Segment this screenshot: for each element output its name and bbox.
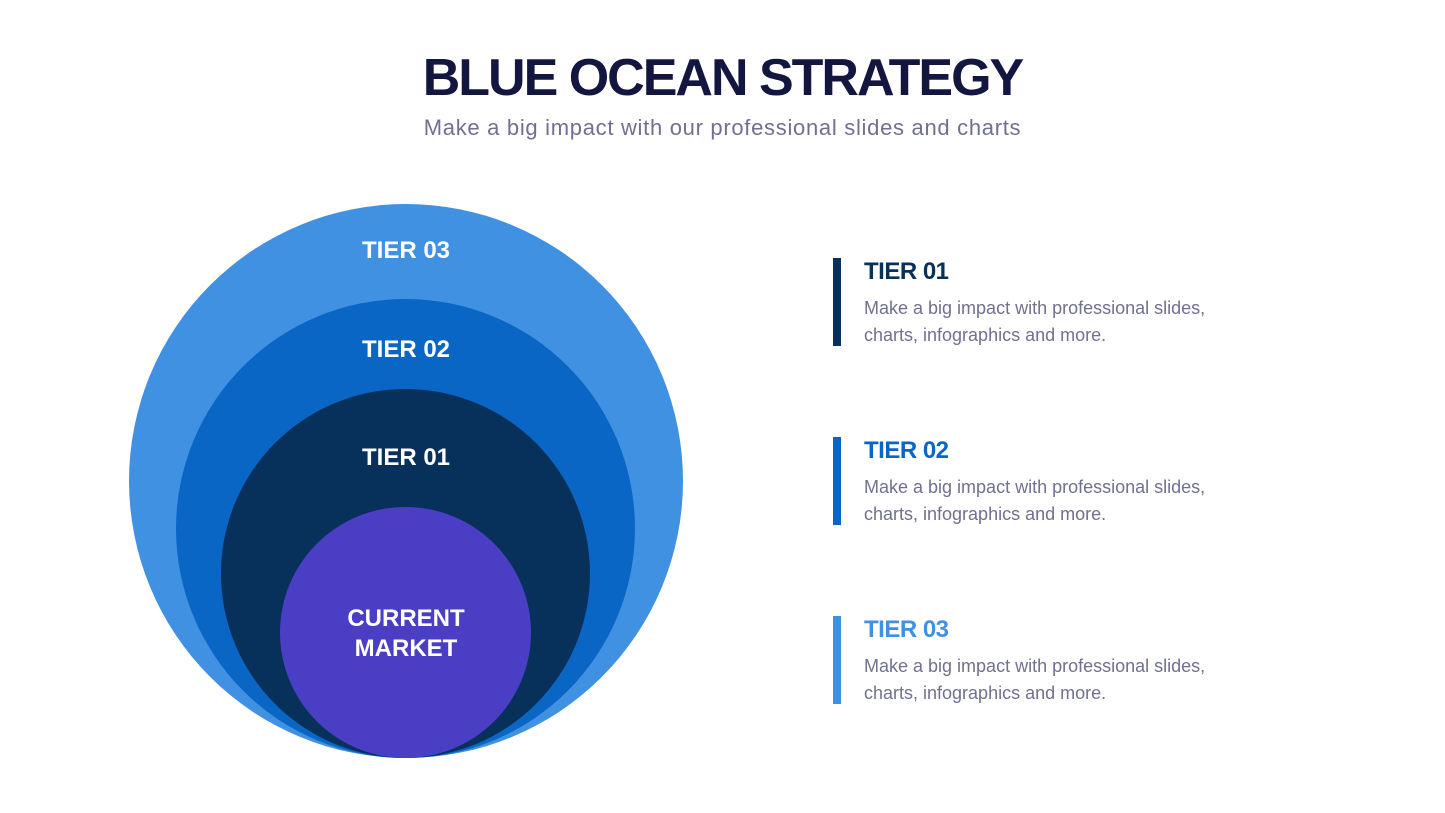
circle: tier 01: TIER 01 <box>362 444 450 471</box>
title: BLUE OCEAN STRATEGY <box>423 49 1022 107</box>
heading: TIER 02 <box>864 437 949 464</box>
circle: current market: MARKET <box>355 635 458 662</box>
item: tier 01 <box>833 258 1205 346</box>
subtitle: Make a big impact with our professional slides and charts <box>424 115 1021 140</box>
bar <box>833 258 841 346</box>
heading: TIER 01 <box>864 258 949 285</box>
circle: current market: CURRENT <box>347 605 465 632</box>
circle: tier 01 <box>221 389 590 758</box>
bar <box>833 437 841 525</box>
circle: current market <box>280 507 531 758</box>
circle: tier 03 <box>129 204 683 758</box>
item: tier 03 <box>833 616 1205 704</box>
circle: tier 03: TIER 03 <box>362 237 450 264</box>
text: Make a big impact with professional slides, charts, infographics and more. <box>864 477 1205 524</box>
text: Make a big impact with professional slides, charts, infographics and more. <box>864 298 1205 345</box>
text: Make a big impact with professional slides, charts, infographics and more. <box>864 656 1205 703</box>
item: tier 02 <box>833 437 1205 525</box>
bar <box>833 616 841 704</box>
circle: tier 02 <box>176 299 635 758</box>
heading: TIER 03 <box>864 616 949 643</box>
circle: tier 02: TIER 02 <box>362 336 450 363</box>
